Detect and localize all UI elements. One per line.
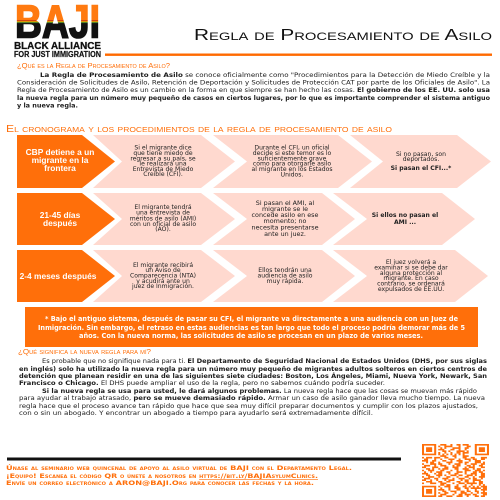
row 3 step 1: un Aviso de (145, 267, 181, 274)
row 3 label: 2-4 meses después (20, 271, 97, 281)
row 3 step 1: y acudirá ante un (136, 277, 190, 285)
row 2 step 2: migrante se le (262, 205, 308, 213)
orange callout: * Bajo el antiguo sistema, después de pasar su CFI, el migrante va directamente a una audiencia con un Juez de (45, 315, 458, 323)
explanation paragraphs: en inglés) solo ha utilizado la nueva regla para un número muy pequeño de migrantes adultos solteros en ciertos centros de (19, 365, 487, 373)
row 2 step 2 (213, 193, 355, 245)
row 1 label (17, 135, 115, 188)
row 1 step 2: suficientemente grave (258, 156, 327, 162)
timeline heading: El cronograma y los procedimientos de la regla de procesamiento de asilo (6, 124, 393, 135)
footer call to action: Únase al seminario web quincenal de apoyo al asilo virtual de BAJI con el Departamento Legal. (6, 463, 352, 472)
row 3 step 3: expulsados de EE.UU. (378, 286, 444, 293)
intro paragraph (17, 71, 490, 110)
footer call to action (6, 463, 352, 487)
row 1 step 1: Entrevista de Miedo (133, 166, 194, 173)
row 3 step 3: migrante. En caso (383, 275, 439, 282)
row 2 step 2: concede asilo en ese (252, 211, 319, 219)
row 3 step 3: contrario, se ordenará (377, 280, 445, 288)
explanation paragraphs: para ayudar al trabajo atrasado, pero se mueve demasiado rápido. Armar un caso de asilo ganador lleva mucho tiempo. La nueva (19, 394, 485, 402)
row 1 step 2: decide si este temor es lo (253, 150, 332, 157)
row 2 label: 21-45 días (40, 210, 81, 220)
logo: BAJI (14, 0, 101, 59)
row 1 step 3: deportados. (403, 156, 439, 163)
row 2: 21-45 días después (17, 193, 475, 245)
explanation paragraphs (19, 358, 487, 417)
row 3 label (17, 250, 115, 302)
intro paragraph: Regla de Procesamiento de Asilo es un cambio en la forma en que siempre se han hecho las cosas. El gobierno de los EE. UU. solo usa (17, 87, 490, 94)
row 1 step 2: Unidos. (281, 172, 303, 178)
row 3 step 3: examinar si se debe dar (374, 264, 448, 272)
row 1 step 2: Durante el CFI, un oficial (254, 144, 330, 152)
footer call to action: ¡Equipo! Escanea el código QR o únete a nosotros en https://bit.ly/BAJIAsylumClinics. (6, 472, 318, 480)
row 3 step 3: El juez volverá a (386, 258, 436, 266)
row 3 step 2: muy rápida. (267, 277, 303, 285)
row 2 step 1: (AO). (155, 226, 171, 233)
intro paragraph: la nueva regla para un número muy pequeño de casos en ciertos lugares, por lo que es importante comprender el sistema antiguo (17, 94, 490, 102)
row 1 step 1: Si el migrante dice (134, 144, 192, 152)
second question heading: ¿Qué significa la nueva regla para mí? (18, 349, 151, 356)
explanation paragraphs: regla hace que el proceso avance tan rápido que hace que sea muy difícil preparar documentos y cumplir con los plazos ajustados, (19, 402, 478, 410)
logo: BAJI: BLACK ALLIANCE (14, 40, 101, 52)
explanation paragraphs: Es probable que no signifique nada para ti. El Departamento de Seguridad Nacional de Estados Unidos (DHS, por sus siglas (42, 358, 487, 365)
intro paragraph: y la nueva regla. (17, 102, 78, 110)
title: Regla de Procesamiento de Asilo (194, 27, 493, 44)
row 3 step 3 (333, 250, 488, 302)
row 2 step 2: momento; no (264, 217, 307, 225)
row 2 step 1 (93, 193, 235, 245)
QR code (422, 444, 489, 497)
row 1 step 2 (213, 135, 372, 188)
row 1 step 3 (350, 135, 491, 188)
row 1 step 1: le realizará una (139, 160, 187, 168)
row 2 step 3: Si ellos no pasan el (372, 212, 438, 219)
row 1 step 2: al migrante en los Estados (251, 166, 333, 173)
row 1 step 3: Si no pasan, son (396, 151, 446, 158)
row 1 label: frontera (44, 163, 76, 173)
row 1 step 2: como para otorgarle asilo (253, 160, 331, 168)
row 3 step 2 (213, 250, 355, 302)
explanation paragraphs: Si la nueva regla se usa para usted, le dará algunos problemas. La nueva regla hace que las cosas se muevan más rápido (42, 387, 477, 395)
row 2 step 3 (333, 193, 475, 245)
row 1 label: CBP detiene a un (26, 147, 94, 157)
explanation paragraphs: Francisco o Chicago. El DHS puede ampliar el uso de la regla, pero no sabemos cuándo podría suceder. (19, 379, 385, 387)
explanation paragraphs: detención que planean residir en una de las siguientes siete ciudades: Boston, Los Ángeles, Miami, Nueva York, Newark, San (19, 371, 487, 380)
row 1 label: migrante en la (32, 155, 89, 165)
row 3 step 2: audiencia de asilo (257, 272, 313, 280)
intro paragraph: La Regla de Procesamiento de Asilo se conoce oficialmente como "Procedimientos para la Detección de Miedo Creíble y la (40, 71, 490, 79)
row 1: CBP detiene (17, 135, 491, 188)
row 3: 2-4 meses después (17, 250, 488, 302)
explanation paragraphs: con o sin un abogado. Y encontrar un abogado a tiempo para ayudarlo será extremadamente difícil. (19, 409, 373, 417)
row 2 step 2: necesita presentarse (251, 224, 319, 232)
row 3 step 1 (93, 250, 235, 302)
orange callout (25, 307, 478, 347)
row 1 step 1: que tiene miedo de (133, 150, 193, 157)
footer call to action: Envíe un correo electrónico a ARON@BAJI.Org para conocer las fechas y la hora. (6, 479, 314, 487)
intro paragraph: Consideración de Solicitudes de Asilo, Retención de Deportación y Solicitudes de Protección CAT por parte de los Oficiales de Asilo". La (17, 78, 490, 86)
row 2 step 2: ante un juez. (264, 230, 306, 238)
orange callout: años. Con la nueva norma, las solicitudes de asilo se procesan en un plazo de varios meses. (79, 332, 423, 340)
row 2 step 1: con un oficial de asilo (130, 221, 196, 228)
row 3 step 1: juez de Inmigración. (131, 282, 194, 290)
row 2 label: después (43, 218, 77, 228)
row 2 step 2: Si pasan el AMI, al (256, 199, 314, 207)
row 1 step 3: Si pasan el CFI...* (391, 165, 452, 172)
row 2 step 1: méritos de asilo (AMI) (130, 214, 196, 222)
orange callout: Inmigración. Sin embargo, el retraso en estas audiencias es tan largo que todo el proceso podría demorar más de 5 (38, 324, 465, 332)
row 1 step 1 (93, 135, 235, 188)
intro question heading: ¿Qué es la Regla de Procesamiento de Asilo? (17, 63, 170, 70)
row 2 step 1: una entrevista de (136, 210, 190, 216)
row 2 step 3: AMI ... (394, 219, 416, 226)
row 3 step 1: Comparecencia (NTA) (130, 272, 196, 280)
row 2 step 1: El migrante tendrá (134, 203, 192, 211)
row 2 label (17, 193, 115, 245)
row 3 step 2: Ellos tendrán una (258, 266, 312, 274)
row 3 step 1: El migrante recibirá (133, 261, 193, 269)
row 3 step 3: alguna protección al (380, 269, 442, 277)
row 1 step 1: regresar a su país, se (130, 154, 196, 162)
logo: BAJI: FOR JUST IMMIGRATION (14, 50, 101, 59)
row 1 step 1: Creíble (CFI). (143, 170, 183, 178)
